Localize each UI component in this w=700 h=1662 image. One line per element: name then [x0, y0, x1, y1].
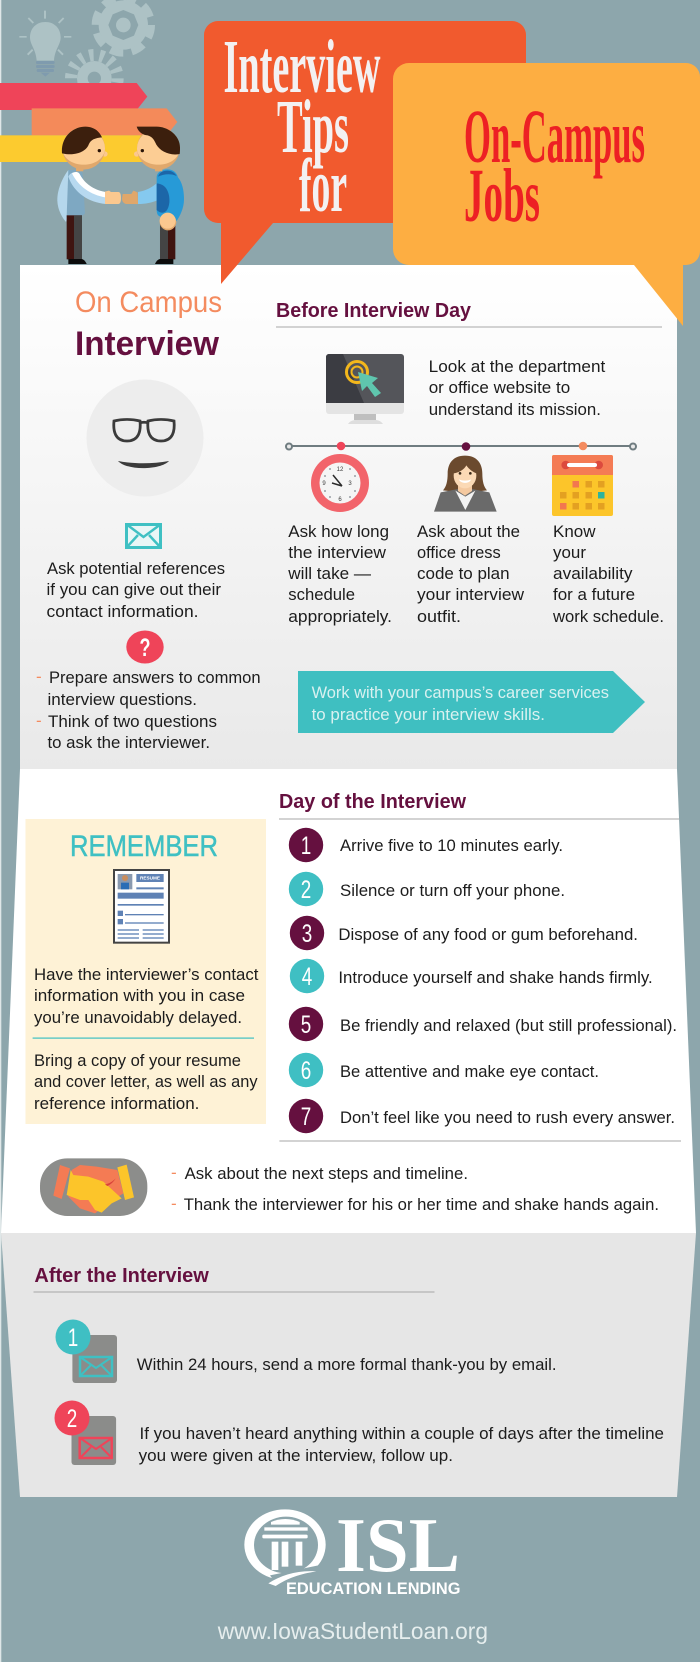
step 6: Be attentive and make eye contact.: [340, 1062, 599, 1081]
header illustration: idea, gears, arrows and handshake: [0, 0, 184, 264]
speech bubble: orange title: [204, 21, 526, 284]
step 7: Don’t feel like you need to rush every answer.: [340, 1108, 675, 1127]
text: next steps: -: [171, 1163, 177, 1182]
figure: right man: [122, 127, 184, 264]
text: next steps: Ask about the next steps and timeline.: [185, 1164, 468, 1183]
logo: ISL Education Lending: ISL: [336, 1502, 460, 1588]
figure: left man: [57, 127, 121, 264]
text: bring a copy: [34, 1051, 258, 1113]
text: look at the department: Look at the department: [429, 357, 606, 376]
text: know your availability: availability: [553, 564, 633, 583]
step 5: 5: [301, 1011, 311, 1039]
text: know your availability: Know: [553, 522, 596, 541]
icon: resume document: RESUME: [140, 876, 161, 882]
text: ask about dress code: outfit.: [417, 607, 461, 626]
text: follow up: If you haven’t heard anything within a couple of days after the timeline: [140, 1424, 664, 1443]
icon: question mark: ?: [140, 634, 150, 662]
title: Interview Tips for: for: [299, 144, 347, 228]
icon: clock: 9: [322, 481, 326, 487]
panel: day of the interview: [1, 769, 696, 1233]
text: next steps: [171, 1163, 659, 1214]
title: Interview Tips for: Tips: [277, 85, 349, 169]
logo: ISL Education Lending: EDUCATION LENDING: [286, 1579, 460, 1598]
text: look at the department: understand its mission.: [429, 400, 601, 419]
icon: calendar: [552, 455, 613, 516]
text: ask how long: the interview: [288, 543, 387, 562]
text: prepare answers list: Think of two questions: [48, 712, 217, 731]
heading: On Campus Interview: Interview: [75, 325, 220, 363]
step 5: Be friendly and relaxed (but still professional).: [340, 1016, 677, 1035]
logo: ISL Education Lending: [244, 1502, 460, 1598]
text: next steps: -: [171, 1194, 177, 1213]
arrow: red: [0, 83, 147, 110]
text: know your availability: [552, 522, 664, 626]
text: know your availability: for a future: [553, 585, 635, 604]
icon: email step 1: [56, 1320, 117, 1383]
icon: handshake: [40, 1158, 147, 1216]
text: follow up: you were given at the interview, follow up.: [139, 1446, 453, 1465]
step 4: Introduce yourself and shake hands firmly.: [338, 968, 653, 987]
timeline: [286, 442, 636, 451]
text: ask about dress code: [417, 522, 525, 626]
step 2: [289, 872, 565, 906]
text: bring a copy: and cover letter, as well as any: [34, 1072, 258, 1091]
text: contact information: information with you in case: [34, 986, 245, 1005]
text: ask references: Ask potential references: [47, 559, 225, 578]
icon: small gear: [71, 55, 118, 102]
step 1: [289, 828, 563, 862]
callout arrow: career services: to practice your interview skills.: [312, 705, 545, 724]
text: contact information: [34, 965, 259, 1027]
panel: on campus interview, before interview day: [20, 265, 677, 769]
heading: Day of the Interview: Day of the Interview: [279, 791, 466, 813]
title: On-Campus Jobs: Jobs: [464, 154, 540, 238]
text: ask references: contact information.: [46, 602, 198, 621]
icon: large gear: [95, 0, 151, 53]
step 3: [290, 916, 638, 950]
text: ask how long: appropriately.: [288, 607, 392, 626]
step 3: 3: [302, 920, 312, 948]
icon: businesswoman: [434, 456, 497, 512]
arrow: orange: [32, 108, 177, 135]
heading: On Campus Interview: [75, 286, 222, 363]
text: prepare answers list: Prepare answers to common: [49, 668, 261, 687]
text: ask about dress code: your interview: [417, 585, 525, 604]
icon: resume document: [114, 870, 169, 943]
step 4: 4: [302, 963, 312, 991]
icon: clock: 6: [338, 497, 342, 503]
text: ask about dress code: office dress: [417, 543, 501, 562]
icon: light bulb: [19, 11, 71, 77]
text: look at the department: or office website to: [429, 378, 570, 397]
text: ask how long: will take —: [287, 564, 371, 583]
heading: After the Interview: After the Interview: [34, 1265, 209, 1287]
title: Interview Tips for: Interview: [224, 25, 381, 109]
title: On-Campus Jobs: [464, 95, 645, 238]
text: prepare answers list: -: [36, 667, 42, 686]
text: prepare answers list: [36, 667, 261, 752]
callout arrow: career services: Work with your campus’s career services: [312, 683, 609, 702]
text: ask how long: Ask how long: [288, 522, 389, 541]
text: contact information: you’re unavoidably delayed.: [34, 1008, 242, 1027]
icon: email step 2: [54, 1400, 116, 1465]
text: ask references: [46, 559, 225, 621]
icon: envelope: [125, 523, 162, 549]
text: website url: www.IowaStudentLoan.org: [217, 1618, 488, 1644]
panel: remember: [26, 819, 266, 1124]
text: within 24 hours: Within 24 hours, send a more formal thank-you by email.: [137, 1355, 557, 1374]
heading: Before Interview Day: Before Interview Day: [276, 300, 472, 322]
icon: email step 1: 1: [68, 1324, 78, 1352]
panel: after the interview: [1, 1233, 696, 1497]
speech bubble: yellow title: [393, 63, 700, 326]
heading: On Campus Interview: On Campus: [75, 286, 222, 319]
step 5: [289, 1007, 677, 1041]
text: ask about dress code: Ask about the: [417, 522, 520, 541]
text: ask how long: schedule: [288, 585, 355, 604]
step 7: 7: [301, 1103, 311, 1131]
text: contact information: Have the interviewer’s contact: [34, 965, 259, 984]
text: ask about dress code: code to plan: [417, 564, 510, 583]
icon: clock: [311, 454, 369, 512]
step 1: 1: [301, 832, 311, 860]
callout arrow: career services: [298, 671, 645, 733]
text: prepare answers list: to ask the interviewer.: [48, 733, 210, 752]
icon: columns emblem: [244, 1509, 332, 1587]
step 7: [289, 1099, 675, 1133]
text: prepare answers list: -: [36, 711, 42, 730]
icon: clock: 3: [348, 481, 352, 487]
icon: glasses face: [86, 380, 204, 496]
text: ask references: if you can give out their: [46, 580, 221, 599]
icon: computer monitor: [326, 354, 404, 424]
step 4: [290, 959, 653, 993]
text: look at the department: [429, 357, 606, 419]
text: next steps: Thank the interviewer for his or her time and shake hands again.: [184, 1195, 659, 1214]
text: know your availability: work schedule.: [552, 607, 664, 626]
icon: email step 2: 2: [67, 1405, 77, 1433]
step 6: [289, 1053, 599, 1087]
step 3: Dispose of any food or gum beforehand.: [338, 925, 638, 944]
text: bring a copy: reference information.: [34, 1094, 199, 1113]
title: Interview Tips for: [224, 25, 381, 228]
step 2: Silence or turn off your phone.: [340, 881, 565, 900]
icon: clock: 12: [337, 467, 344, 473]
arrow: yellow: [0, 135, 143, 162]
heading: REMEMBER: REMEMBER: [70, 830, 218, 863]
text: bring a copy: Bring a copy of your resume: [34, 1051, 241, 1070]
step 1: Arrive five to 10 minutes early.: [340, 836, 563, 855]
text: follow up: [139, 1424, 664, 1465]
step 6: 6: [301, 1057, 311, 1085]
step 2: 2: [301, 876, 311, 904]
text: ask how long: [287, 522, 392, 626]
text: know your availability: your: [553, 543, 586, 562]
icon: question mark: [126, 630, 164, 664]
text: prepare answers list: interview questions.: [48, 690, 197, 709]
